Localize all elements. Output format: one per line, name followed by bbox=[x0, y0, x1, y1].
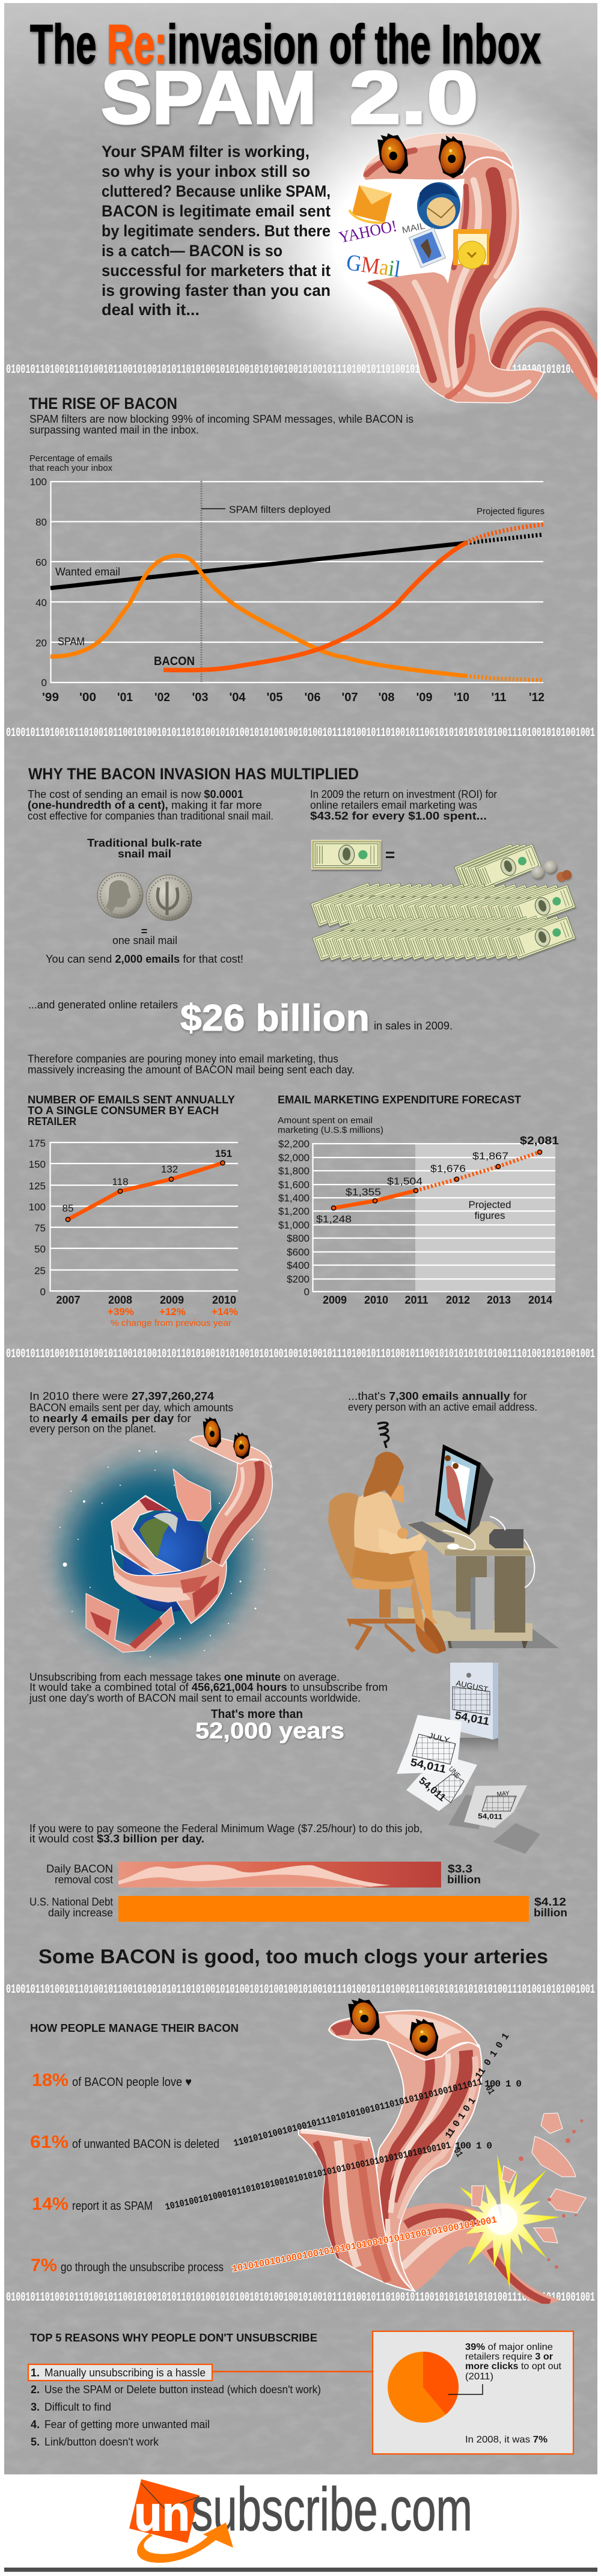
icon: one dollar equals: = bbox=[385, 845, 395, 864]
data labels: $2,081 bbox=[520, 1135, 559, 1147]
icons: email clients bbox=[337, 182, 489, 282]
keyboard bbox=[407, 1521, 454, 1542]
stat: 14 percent: report it as SPAM bbox=[72, 2200, 153, 2213]
text: equals one snail mail: one snail mail bbox=[112, 934, 177, 946]
text block: rise of bacon intro: SPAM filters are now blocking 99% of incoming SPAM messages, while BACON is bbox=[29, 413, 413, 425]
y axis labels: $1,600 bbox=[278, 1179, 310, 1191]
axis title bbox=[29, 453, 112, 473]
text: equals one snail mail: You can send 2,000 emails for that cost! bbox=[46, 953, 243, 965]
series: bacon: BACON bbox=[154, 655, 195, 668]
heading: email marketing expenditure forecast: EMAIL MARKETING EXPENDITURE FORECAST bbox=[278, 1094, 521, 1106]
heading: number of emails sent annually bbox=[28, 1094, 235, 1127]
label: projected figures: figures bbox=[475, 1210, 505, 1221]
logo: unsubscribe.com bbox=[129, 2475, 472, 2563]
y axis labels: $2,200 bbox=[278, 1138, 310, 1150]
series: wanted email bbox=[50, 535, 543, 588]
text block: cost of sending an email: (one-hundredth of a cent), making it far more bbox=[28, 799, 262, 811]
axis title: marketing (U.S.$ millions) bbox=[278, 1125, 383, 1135]
heading: number of emails sent annually: TO A SINGLE CONSUMER BY EACH bbox=[28, 1105, 219, 1117]
stat: 61 percent bbox=[30, 2132, 219, 2152]
icon: thunderbird bbox=[417, 182, 460, 229]
data labels: $1,504 bbox=[387, 1176, 423, 1187]
monitor bbox=[435, 1444, 493, 1535]
bar chart: daily cost comparison bbox=[29, 1862, 567, 1922]
intro text block bbox=[102, 143, 331, 319]
list: top 5 reasons bbox=[28, 2364, 321, 2448]
chair bbox=[328, 1493, 361, 1580]
stat: 14 percent: 14% bbox=[32, 2194, 69, 2214]
text block: rise of bacon intro: surpassing wanted mail in the inbox. bbox=[29, 424, 199, 436]
binary stream: 61 percent deleted: 01 bbox=[483, 2084, 496, 2097]
wordmark: un bbox=[134, 2486, 190, 2541]
x axis labels: '11 bbox=[492, 691, 506, 704]
y axis labels bbox=[30, 476, 47, 688]
x axis labels: '05 bbox=[267, 691, 282, 704]
text block: 2010 emails per day: BACON emails sent per day, which amounts bbox=[29, 1402, 233, 1414]
text: equals one snail mail: = bbox=[141, 925, 147, 937]
data labels: $1,867 bbox=[472, 1150, 508, 1162]
list: top 5 reasons: Link/button doesn't work bbox=[44, 2436, 159, 2448]
calendar: august bbox=[450, 1663, 498, 1753]
label: traditional bulk-rate snail mail bbox=[87, 837, 202, 860]
y axis labels: 0 bbox=[41, 677, 47, 688]
y axis labels: 75 bbox=[34, 1222, 46, 1234]
label: projected figures bbox=[469, 1199, 511, 1221]
marker: spam filters deployed: SPAM filters deployed bbox=[229, 504, 331, 515]
x axis labels: 2009 bbox=[323, 1294, 347, 1306]
y axis labels: 25 bbox=[34, 1265, 46, 1277]
device box bbox=[489, 1529, 523, 1548]
data line bbox=[66, 1161, 225, 1222]
list: top 5 reasons: 1. bbox=[31, 2367, 40, 2379]
x axis labels: '04 bbox=[230, 691, 246, 704]
cables and mouse bbox=[443, 1516, 534, 1587]
callout: $26 billion in sales: ...and generated online retailers bbox=[28, 999, 178, 1011]
bar labels right: $3.3 bbox=[448, 1863, 472, 1875]
list: top 5 reasons: 2. bbox=[31, 2384, 40, 2396]
connector line bbox=[212, 2371, 372, 2372]
x axis labels: '07 bbox=[341, 691, 358, 704]
intro text block: deal with it... bbox=[102, 301, 200, 319]
y axis labels: 175 bbox=[29, 1138, 46, 1149]
icon: bacon monster header bbox=[361, 131, 597, 403]
y axis labels: $200 bbox=[287, 1274, 310, 1285]
illustration: woman at computer bbox=[328, 1423, 559, 1654]
text block: unsubscribing takes time: It would take a combined total of 456,621,004 hours to unsubscribe from bbox=[29, 1681, 388, 1693]
calendar: july: 54,011 bbox=[409, 1756, 447, 1775]
list: top 5 reasons: 4. bbox=[31, 2418, 40, 2430]
heading: top 5 reasons: TOP 5 REASONS WHY PEOPLE DON'T UNSUBSCRIBE bbox=[30, 2332, 317, 2344]
y axis labels: $1,000 bbox=[278, 1219, 310, 1231]
intro text block: successful for marketers that it bbox=[102, 262, 331, 280]
icon: one dollar equals bbox=[311, 840, 395, 869]
pie text: (2011) bbox=[465, 2372, 493, 2382]
stat: 61 percent: 61% bbox=[30, 2132, 69, 2152]
x axis labels: 2007 bbox=[56, 1294, 81, 1306]
list: top 5 reasons: Difficult to find bbox=[44, 2401, 111, 2413]
data labels: 85 bbox=[63, 1203, 73, 1214]
callout: 52,000 years: 52,000 years bbox=[195, 1719, 344, 1744]
y axis labels: $2,000 bbox=[278, 1152, 310, 1164]
ghost pages bbox=[448, 1795, 540, 1854]
x axis labels: 2011 bbox=[404, 1294, 429, 1306]
pie text: more clicks to opt out bbox=[465, 2361, 562, 2372]
y axis labels: 40 bbox=[35, 597, 47, 609]
heading: number of emails sent annually: RETAILER bbox=[28, 1115, 76, 1127]
icon: gmail: GMail bbox=[345, 250, 402, 282]
footer bar bbox=[4, 2568, 597, 2572]
x axis labels: 2010 bbox=[364, 1294, 388, 1306]
text block: cost of sending an email: cost effective for companies than traditional snail mail. bbox=[28, 810, 273, 822]
x axis labels: '03 bbox=[192, 691, 208, 704]
stat: 7 percent bbox=[31, 2256, 224, 2275]
text block: unsubscribing takes time bbox=[29, 1671, 388, 1704]
heading: number of emails sent annually: NUMBER OF EMAILS SENT ANNUALLY bbox=[28, 1094, 235, 1106]
text block: 2010 emails per day: to nearly 4 emails per day for bbox=[29, 1412, 191, 1424]
legs bbox=[409, 1550, 438, 1624]
x axis labels: 2014 bbox=[528, 1294, 552, 1306]
data labels bbox=[316, 1135, 559, 1225]
y axis labels: 0 bbox=[304, 1286, 310, 1298]
bar: daily bacon removal cost bbox=[118, 1862, 441, 1888]
stat: 61 percent: of unwanted BACON is deleted bbox=[72, 2138, 219, 2151]
text block: minimum wage bbox=[29, 1823, 423, 1845]
wordmark: subscribe.com bbox=[191, 2475, 472, 2544]
data labels bbox=[63, 1148, 232, 1214]
data labels: $1,248 bbox=[316, 1213, 352, 1225]
x axis labels bbox=[56, 1294, 236, 1306]
stat: 18 percent bbox=[32, 2070, 192, 2090]
text block: rise of bacon intro bbox=[29, 413, 413, 436]
bar labels right: billion bbox=[534, 1907, 567, 1919]
y axis labels: 20 bbox=[35, 637, 47, 649]
calendar: may: MAY bbox=[496, 1790, 510, 1798]
desk bbox=[398, 1521, 532, 1648]
bar labels left: daily increase bbox=[48, 1907, 113, 1919]
shoes bbox=[424, 1618, 446, 1654]
bar labels left: U.S. National Debt bbox=[29, 1896, 113, 1908]
y axis labels: 50 bbox=[34, 1244, 46, 1255]
intro text block: is growing faster than you can bbox=[102, 281, 331, 299]
intro text block: so why is your inbox still so bbox=[102, 162, 310, 180]
text block: therefore companies bbox=[28, 1053, 355, 1076]
text block: return on investment: In 2009 the return on investment (ROI) for bbox=[310, 788, 497, 800]
torso bbox=[354, 1492, 409, 1553]
x axis labels: '09 bbox=[416, 691, 433, 704]
y axis labels: $800 bbox=[287, 1233, 310, 1244]
y axis labels: 0 bbox=[40, 1286, 46, 1298]
binary stream: 61 percent deleted bbox=[233, 2031, 522, 2149]
icon: two dimes bbox=[97, 872, 192, 921]
icon: globe bbox=[123, 1511, 215, 1612]
x axis labels: 2009 bbox=[160, 1294, 184, 1306]
series: spam: SPAM bbox=[58, 636, 85, 648]
x axis labels: 2010 bbox=[212, 1294, 236, 1306]
intro text block: is a catch— BACON is so bbox=[102, 242, 282, 260]
calendar: june: UNE bbox=[447, 1765, 462, 1780]
illustration: falling calendar pages bbox=[397, 1663, 540, 1854]
intro text block: cluttered? Because unlike SPAM, bbox=[102, 182, 331, 200]
text block: cost of sending an email: The cost of sending an email is now $0.0001 bbox=[28, 788, 243, 800]
axis title bbox=[278, 1115, 383, 1135]
icon: yahoo mail: YAHOO! bbox=[337, 216, 398, 247]
label: projected figures: Projected bbox=[469, 1199, 511, 1210]
pie text: In 2008, it was 7% bbox=[465, 2435, 548, 2445]
calendar: june: 54,011 bbox=[416, 1775, 448, 1803]
bar: us national debt daily increase bbox=[118, 1896, 529, 1922]
floor shadow bbox=[448, 1628, 559, 1648]
intro text block: by legitimate senders. But there bbox=[102, 222, 331, 240]
person bbox=[328, 1452, 446, 1654]
intro text block: BACON is legitimate email sent bbox=[102, 202, 331, 220]
text block: therefore companies: massively increasing the amount of BACON mail being sent each day. bbox=[28, 1064, 355, 1076]
text block: return on investment bbox=[310, 788, 497, 822]
intro text block: Your SPAM filter is working, bbox=[102, 143, 310, 161]
bar labels left: Daily BACON bbox=[46, 1863, 113, 1875]
ribbon: bacon around globe bbox=[86, 1436, 272, 1652]
binary stream: 14 percent reported: 01 bbox=[451, 2147, 465, 2159]
binary stream: 61 percent deleted: 11 0 1 0 1 bbox=[473, 2031, 511, 2081]
icon: stress scribble bbox=[377, 1423, 389, 1448]
bar labels left: removal cost bbox=[55, 1874, 113, 1886]
pie text: retailers require 3 or bbox=[465, 2352, 553, 2362]
y axis labels: $400 bbox=[287, 1260, 310, 1271]
text: equals one snail mail bbox=[46, 925, 243, 965]
panel: 39 percent require 3 or more clicks bbox=[373, 2331, 573, 2454]
x axis labels: 2012 bbox=[446, 1294, 470, 1306]
text block: 2010 emails per day: every person on the planet. bbox=[29, 1423, 156, 1435]
list: top 5 reasons: Manually unsubscribing is a hassle bbox=[44, 2367, 206, 2379]
text block: return on investment: online retailers email marketing was bbox=[310, 799, 477, 811]
axis title: Percentage of emails bbox=[29, 453, 112, 464]
binary stream: 7 percent unsubscribe: 1010100101000100101010101001010101001010001011001 bbox=[231, 2215, 498, 2275]
y axis labels: 150 bbox=[29, 1159, 46, 1170]
pie chart bbox=[388, 2352, 459, 2423]
callout: 52,000 years bbox=[195, 1708, 344, 1744]
percent change labels: +12% bbox=[159, 1306, 186, 1317]
line chart: rise of bacon bbox=[29, 453, 545, 704]
y axis labels: 60 bbox=[35, 557, 47, 568]
pie text: 39% of major online bbox=[465, 2342, 553, 2352]
icon: apple mail stamp bbox=[409, 228, 446, 268]
text block: unsubscribing takes time: Unsubscribing from each message takes one minute on average. bbox=[29, 1671, 340, 1683]
callout: $26 billion in sales: $26 billion bbox=[180, 998, 370, 1039]
calendar: june bbox=[406, 1759, 477, 1811]
bar labels right: $4.12 bbox=[534, 1896, 566, 1908]
binary stream: 61 percent deleted: 110101010010100101110101010010110101010101001011011 bbox=[233, 2076, 484, 2149]
subtitle: SPAM 2.0 bbox=[101, 57, 478, 140]
y axis labels: 100 bbox=[29, 1201, 46, 1213]
text block: return on investment: $43.52 for every $1.00 spent... bbox=[310, 810, 487, 822]
icon: hotmail envelope bbox=[347, 184, 393, 226]
illustration: big bacon monster bbox=[299, 1996, 560, 2304]
x axis labels: '08 bbox=[379, 691, 394, 704]
y axis labels: 125 bbox=[29, 1180, 46, 1192]
x axis labels bbox=[323, 1294, 552, 1306]
x axis labels: '01 bbox=[117, 691, 133, 704]
x axis labels: '12 bbox=[529, 691, 545, 704]
icon: swoosh arrow bbox=[137, 2522, 233, 2563]
list: top 5 reasons: 5. bbox=[31, 2436, 40, 2448]
icon: yahoo mail: MAIL bbox=[401, 221, 426, 236]
stat: 18 percent: 18% bbox=[32, 2070, 69, 2090]
leader line bbox=[448, 2384, 483, 2394]
percent change labels bbox=[108, 1306, 238, 1317]
icon: envelope bbox=[129, 2479, 200, 2543]
axis title: that reach your inbox bbox=[29, 463, 112, 473]
label: projected figures: Projected figures bbox=[477, 506, 545, 517]
icon: yellow burst bbox=[460, 2154, 560, 2290]
y axis labels bbox=[29, 1138, 46, 1298]
series: spam bbox=[50, 556, 542, 680]
axis title: Amount spent on email bbox=[278, 1115, 373, 1126]
y axis labels: 80 bbox=[35, 517, 47, 528]
skirt bbox=[352, 1545, 421, 1581]
illustration: bacon wrapping the globe bbox=[59, 1415, 272, 1657]
text block: 2010 emails per day bbox=[29, 1390, 233, 1435]
icon: outlook bbox=[453, 229, 489, 269]
y axis labels: $1,200 bbox=[278, 1206, 310, 1217]
binary stream: 14 percent reported: 11 0 1 0 1 bbox=[443, 2096, 478, 2141]
data line bbox=[331, 1150, 542, 1210]
highlight box: first reason bbox=[28, 2364, 212, 2381]
snail mail cost comparison bbox=[46, 837, 243, 965]
x axis labels bbox=[42, 691, 545, 704]
text block: cost of sending an email bbox=[28, 788, 273, 822]
list: top 5 reasons: 3. bbox=[31, 2401, 40, 2413]
subtitle: SPAM 2.0: SPAM bbox=[101, 57, 317, 140]
callout: 52,000 years: That's more than bbox=[211, 1708, 303, 1721]
text block: 7,300 emails annually bbox=[348, 1390, 537, 1413]
list: top 5 reasons: Fear of getting more unwanted mail bbox=[44, 2418, 210, 2430]
subtitle: SPAM 2.0: 2.0 bbox=[349, 57, 478, 140]
stat: 7 percent: go through the unsubscribe process bbox=[61, 2261, 224, 2274]
data labels: $1,355 bbox=[346, 1186, 381, 1198]
stat: 7 percent: 7% bbox=[31, 2256, 57, 2275]
calendar: august: AUGUST bbox=[455, 1678, 489, 1694]
text block: minimum wage: it would cost $3.3 billion per day. bbox=[29, 1833, 204, 1845]
x axis labels: '99 bbox=[42, 691, 59, 704]
calendar: august: 54,011 bbox=[454, 1709, 490, 1728]
callout: $26 billion in sales bbox=[28, 998, 453, 1039]
x axis labels: '10 bbox=[454, 691, 469, 704]
text block: 7,300 emails annually: ...that's 7,300 emails annually for bbox=[348, 1390, 527, 1402]
x axis labels: '02 bbox=[154, 691, 170, 704]
stat: 14 percent bbox=[32, 2194, 153, 2214]
line chart: emails per retailer bbox=[29, 1138, 238, 1328]
head and hair bbox=[385, 1485, 404, 1503]
binary stream: 14 percent reported: 100 1 0 bbox=[455, 2141, 492, 2151]
icons: exploded bacon fragments bbox=[472, 2113, 586, 2269]
x axis labels: '00 bbox=[79, 691, 96, 704]
icons: monster eyes bbox=[203, 1415, 252, 1460]
x axis labels: 2008 bbox=[108, 1294, 132, 1306]
calendar: may bbox=[464, 1785, 527, 1828]
heading: how people manage their bacon: HOW PEOPLE MANAGE THEIR BACON bbox=[30, 2022, 239, 2034]
heading: the rise of bacon: THE RISE OF BACON bbox=[29, 394, 177, 412]
data labels: $1,676 bbox=[430, 1163, 466, 1174]
y axis labels: $600 bbox=[287, 1247, 310, 1258]
line chart: expenditure forecast bbox=[278, 1115, 559, 1306]
y axis labels bbox=[278, 1138, 310, 1298]
heading: some bacon is good: Some BACON is good, too much clogs your arteries bbox=[38, 1945, 548, 1967]
text block: minimum wage: If you were to pay someone the Federal Minimum Wage ($7.25/hour) to do this job, bbox=[29, 1823, 423, 1835]
bar labels right bbox=[447, 1863, 567, 1919]
calendar: july bbox=[397, 1715, 462, 1775]
calendar: july: JULY bbox=[427, 1731, 451, 1745]
y axis labels: $1,800 bbox=[278, 1165, 310, 1177]
list: top 5 reasons: Use the SPAM or Delete button instead (which doesn't work) bbox=[44, 2384, 321, 2396]
icons: eyes bbox=[347, 1996, 441, 2057]
percent change labels: +14% bbox=[212, 1306, 238, 1317]
series: bacon bbox=[154, 524, 543, 670]
callout: $26 billion in sales: in sales in 2009. bbox=[374, 1020, 453, 1032]
binary stream: 61 percent deleted: 100 1 0 bbox=[484, 2079, 522, 2090]
stats: how people manage bacon bbox=[30, 2070, 224, 2275]
label: traditional bulk-rate snail mail: snail mail bbox=[118, 848, 171, 860]
y axis labels: 100 bbox=[30, 476, 47, 488]
label: traditional bulk-rate snail mail: Traditional bulk-rate bbox=[87, 837, 202, 849]
x axis labels: '06 bbox=[304, 691, 321, 704]
x axis labels: 2013 bbox=[487, 1294, 511, 1306]
calendar: may: 54,011 bbox=[478, 1812, 503, 1821]
data labels: 118 bbox=[112, 1176, 129, 1188]
note: percent change: % change from previous year bbox=[111, 1318, 231, 1328]
text block: 2010 emails per day: In 2010 there were 27,397,260,274 bbox=[29, 1390, 214, 1402]
bar labels right: billion bbox=[447, 1874, 481, 1886]
pie text bbox=[465, 2342, 562, 2445]
text block: unsubscribing takes time: just one day's worth of BACON mail sent to email accounts worldwide. bbox=[29, 1692, 361, 1704]
bar labels left bbox=[29, 1863, 113, 1919]
text block: 7,300 emails annually: every person with an active email address. bbox=[348, 1401, 537, 1413]
y axis labels: $1,400 bbox=[278, 1192, 310, 1204]
stat: 18 percent: of BACON people love ♥ bbox=[72, 2076, 192, 2089]
icon: stack of dollar bills bbox=[311, 844, 576, 961]
wordmark bbox=[134, 2475, 472, 2544]
percent change labels: +39% bbox=[108, 1306, 134, 1317]
series: wanted email: Wanted email bbox=[55, 566, 120, 578]
binary stream: 14 percent reported: 101010010100010110101010010101010101010100101010101010100101 bbox=[164, 2140, 452, 2213]
data labels: 132 bbox=[161, 1164, 178, 1175]
heading: why the bacon invasion has multiplied: WHY THE BACON INVASION HAS MULTIPLIED bbox=[28, 765, 359, 783]
data labels: 151 bbox=[215, 1148, 232, 1159]
text block: therefore companies: Therefore companies are pouring money into email marketing, thus bbox=[28, 1053, 338, 1065]
